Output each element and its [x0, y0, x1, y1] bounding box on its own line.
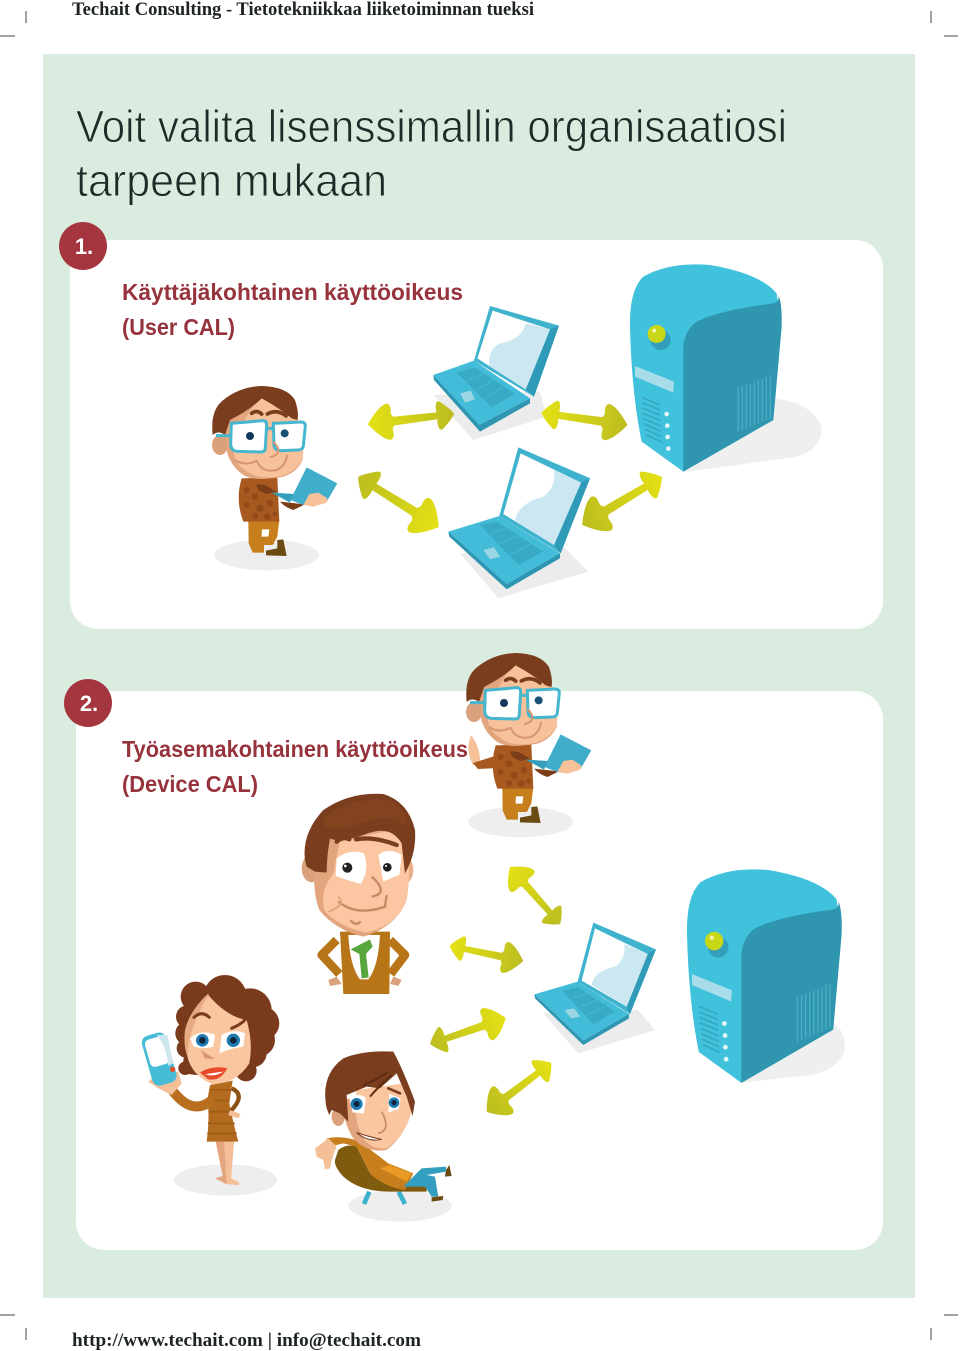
- icon: laptop upper: [433, 306, 559, 440]
- number badge 2: [64, 679, 112, 727]
- heading: device CAL: (Device CAL): [122, 771, 258, 797]
- heading: user CAL: (User CAL): [122, 314, 235, 340]
- arrow: person to lower laptop: [348, 460, 449, 544]
- icon: server: [630, 264, 822, 472]
- panel 1: user CAL: [59, 222, 883, 629]
- arrow: lounging man to laptop: [476, 1049, 562, 1126]
- heading: device CAL: [122, 736, 468, 797]
- number badge 1: [59, 222, 107, 270]
- character: man with glasses and tablet: [466, 653, 591, 837]
- icon: server: [687, 869, 845, 1083]
- icon: laptop lower: [448, 447, 590, 598]
- character: man with glasses and tablet: [212, 386, 337, 570]
- panel 2: device CAL: [64, 653, 883, 1250]
- arrow: person to upper laptop: [366, 396, 456, 442]
- arrow: glasses man to laptop: [498, 856, 572, 935]
- arrow: woman to laptop: [425, 1002, 511, 1060]
- arrow: upper laptop to server: [539, 395, 630, 443]
- heading: device CAL: Työasemakohtainen käyttöoikeus: [122, 736, 468, 762]
- heading: user CAL: [122, 279, 463, 340]
- footer contact text: http://www.techait.com | info@techait.com: [72, 1330, 421, 1351]
- title: tarpeen mukaan: [76, 155, 387, 206]
- character: woman with phone: [140, 975, 279, 1196]
- number badge 2: 2.: [80, 691, 98, 716]
- character: man on lounge chair: [315, 1051, 452, 1222]
- heading: user CAL: Käyttäjäkohtainen käyttöoikeus: [122, 279, 463, 305]
- title: [76, 101, 787, 206]
- character: manager with green tie: [302, 794, 415, 994]
- icon: laptop: [534, 923, 656, 1053]
- number badge 1: 1.: [75, 234, 93, 259]
- arrow: lower laptop to server: [572, 460, 672, 542]
- arrow: manager to laptop: [447, 931, 526, 976]
- title: Voit valita lisenssimallin organisaatiosi: [76, 101, 787, 152]
